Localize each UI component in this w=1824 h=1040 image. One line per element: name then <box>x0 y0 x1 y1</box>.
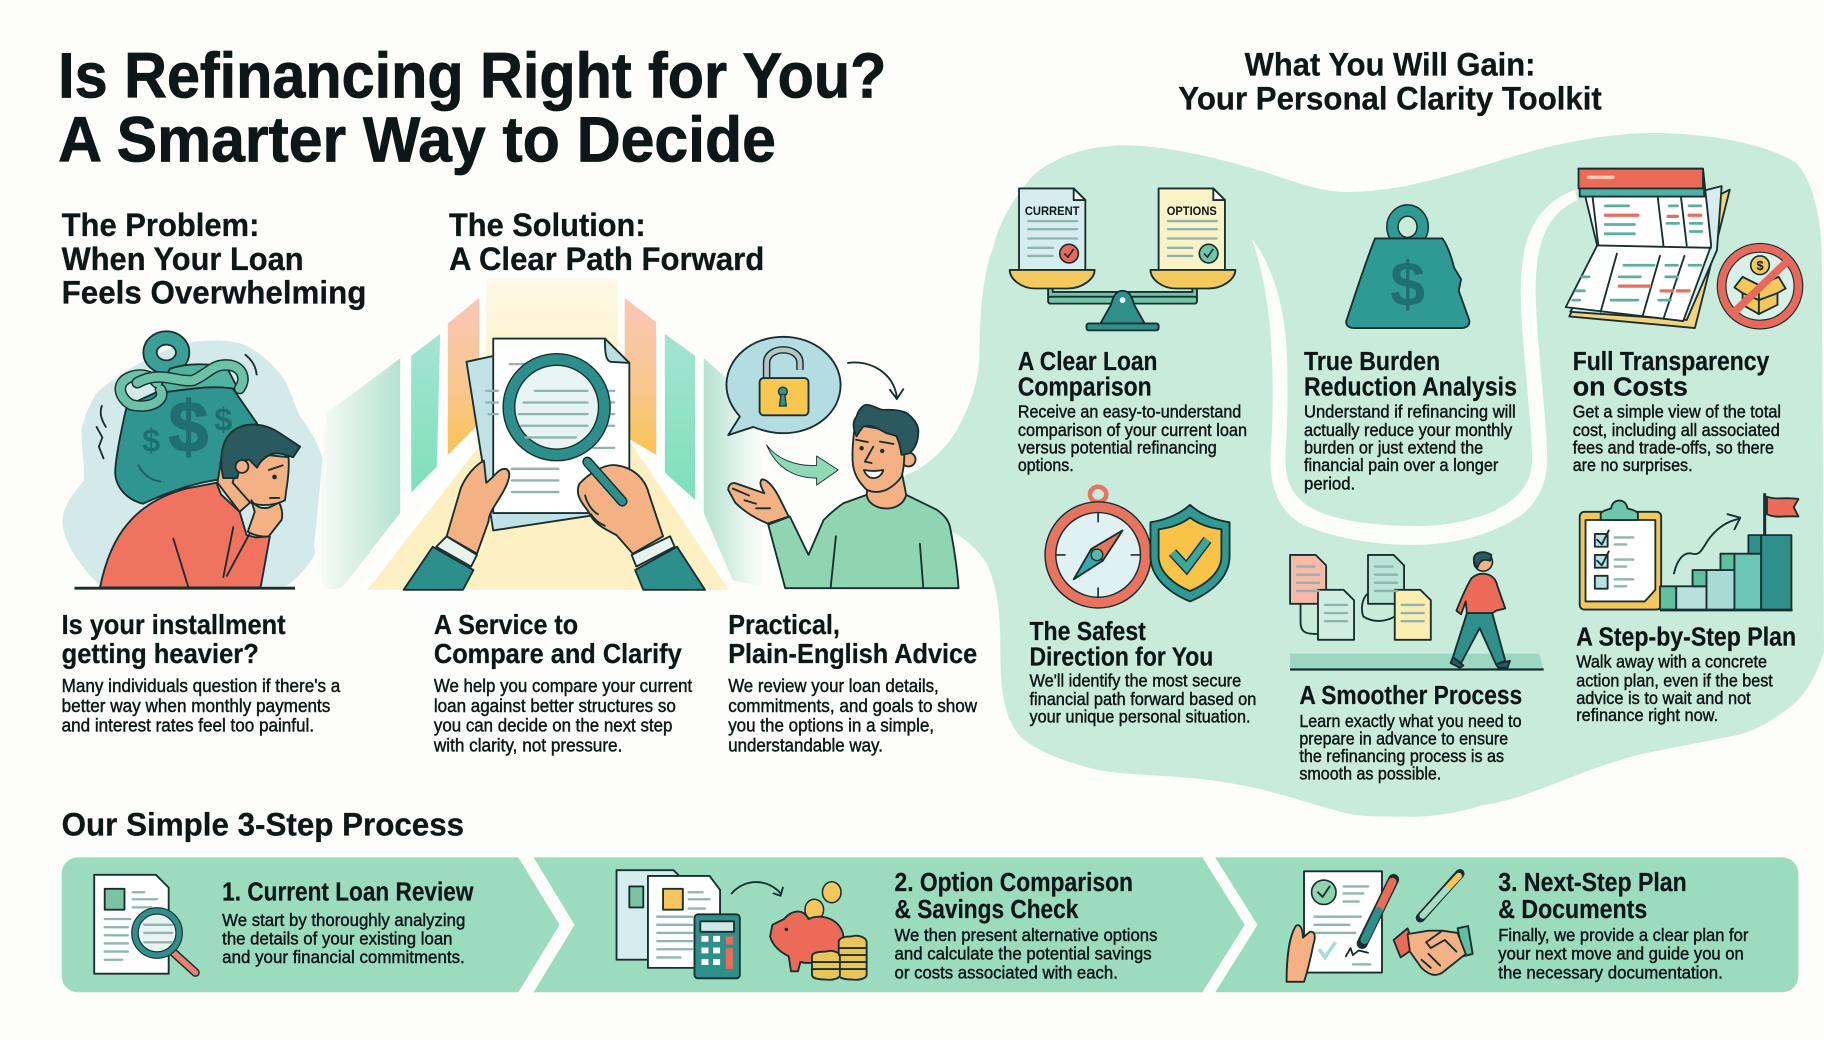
title: Is Refinancing Right for You? <box>58 40 886 112</box>
card: a step-by-step plan: A Step-by-Step Plan <box>1576 622 1796 652</box>
step 2 text: and calculate the potential savings <box>895 944 1152 964</box>
card: a step-by-step plan: Walk away with a concrete <box>1576 652 1767 672</box>
text block: a service to compare and clarify <box>433 609 692 755</box>
card: a smoother process: Learn exactly what you need to <box>1299 711 1522 731</box>
card: a smoother process: the refinancing process is as <box>1299 746 1504 766</box>
text block: a service to compare and clarify: We help you compare your current <box>434 676 692 696</box>
card: a step-by-step plan: advice is to wait and not <box>1576 688 1751 708</box>
card: the safest direction for you: The Safest <box>1029 616 1146 646</box>
step 2 text: or costs associated with each. <box>895 962 1118 982</box>
icon: money weight <box>1346 211 1469 328</box>
heading: the problem: The Problem: <box>62 207 259 243</box>
card: true burden reduction analysis: Understand if refinancing will <box>1304 402 1516 422</box>
card: a clear loan comparison: Receive an easy-to-understand <box>1018 402 1241 422</box>
step 3 text: Finally, we provide a clear plan for <box>1498 925 1749 945</box>
step 1 text: We start by thoroughly analyzing <box>222 910 465 930</box>
card: true burden reduction analysis: True Burden <box>1304 346 1440 376</box>
card: full transparency on costs: are no surprises. <box>1573 455 1693 475</box>
card: a clear loan comparison: comparison of your current loan <box>1018 420 1247 440</box>
step 3 text: your next move and guide you on <box>1498 944 1744 964</box>
card: a clear loan comparison: options. <box>1018 455 1074 475</box>
card: full transparency on costs: cost, including all associated <box>1573 420 1780 440</box>
title: A Smarter Way to Decide <box>58 104 776 176</box>
icon: balance scale comparing current and options: CURRENT <box>1025 204 1080 218</box>
text block: practical plain-english advice: We review your loan details, <box>728 676 939 696</box>
icon: money weight: $ <box>1390 250 1425 320</box>
step 3 icon: signed document, pens and handshake <box>1287 871 1473 982</box>
text block: is your installment getting heavier: better way when monthly payments <box>62 696 330 716</box>
illustration: worried man carrying a money bag <box>63 338 328 588</box>
card: a clear loan comparison <box>1018 346 1247 475</box>
step 3 text: the necessary documentation. <box>1498 962 1723 982</box>
card: full transparency on costs: fees and trade-offs, so there <box>1573 438 1774 458</box>
card: true burden reduction analysis: Reduction Analysis <box>1304 372 1517 402</box>
step 2 text: We then present alternative options <box>895 925 1158 945</box>
card: full transparency on costs <box>1573 346 1781 475</box>
text block: a service to compare and clarify: Compare and Clarify <box>434 638 682 669</box>
icon: balance scale comparing current and options <box>1010 188 1235 330</box>
step 3 text: 3. Next-Step Plan <box>1498 869 1687 897</box>
card: a step-by-step plan: action plan, even if the best <box>1576 670 1773 690</box>
card: true burden reduction analysis: burden or just extend the <box>1304 438 1483 458</box>
card: full transparency on costs: Get a simple view of the total <box>1573 402 1781 422</box>
card: true burden reduction analysis: actually reduce your monthly <box>1304 420 1512 440</box>
card: a smoother process: A Smoother Process <box>1299 680 1522 710</box>
text block: practical plain-english advice: understandable way. <box>728 735 883 755</box>
card: a step-by-step plan: refinance right now. <box>1576 705 1718 725</box>
title <box>58 40 886 176</box>
process band <box>62 856 1798 993</box>
card: a smoother process <box>1299 680 1522 783</box>
step 1 text: the details of your existing loan <box>222 929 453 949</box>
heading: what you will gain: Your Personal Clarity Toolkit <box>1178 80 1602 116</box>
card: the safest direction for you: Direction for You <box>1029 641 1213 671</box>
card: full transparency on costs: on Costs <box>1573 372 1688 402</box>
text block: is your installment getting heavier <box>62 609 341 736</box>
card: true burden reduction analysis <box>1304 346 1517 494</box>
text block: practical plain-english advice: commitments, and goals to show <box>728 696 978 716</box>
step 1 text: and your financial commitments. <box>222 947 465 967</box>
step 2 text: 2. Option Comparison <box>895 869 1133 897</box>
text block: a service to compare and clarify: A Service to <box>434 609 578 640</box>
card: the safest direction for you: your unique personal situation. <box>1029 706 1251 726</box>
icon: balance scale comparing current and options: OPTIONS <box>1167 204 1217 218</box>
illustration: worried man carrying a money bag: $ <box>214 401 232 437</box>
text block: is your installment getting heavier: getting heavier? <box>62 638 259 669</box>
text block: is your installment getting heavier: Is your installment <box>62 609 286 640</box>
step 2 text: & Savings Check <box>895 896 1079 924</box>
card: the safest direction for you: financial path forward based on <box>1029 689 1256 709</box>
text block: practical plain-english advice: Plain-English Advice <box>728 638 977 669</box>
card: a clear loan comparison: Comparison <box>1018 372 1152 402</box>
text block: a service to compare and clarify: with clarity, not pressure. <box>433 735 622 755</box>
icon: cost spreadsheet and no hidden fees sign: $ <box>1756 258 1764 273</box>
heading: the solution: A Clear Path Forward <box>449 241 764 277</box>
card: a smoother process: smooth as possible. <box>1299 763 1441 783</box>
heading: the problem: When Your Loan <box>62 241 304 277</box>
text block: a service to compare and clarify: loan against better structures so <box>434 696 676 716</box>
icon: clipboard checklist and rising steps <box>1580 493 1798 610</box>
heading: the solution <box>449 207 764 277</box>
text block: practical plain-english advice <box>728 609 978 755</box>
card: a clear loan comparison: A Clear Loan <box>1018 346 1157 376</box>
step 1 text <box>222 878 474 967</box>
icon: cost spreadsheet and no hidden fees sign <box>1566 169 1798 328</box>
card: a smoother process: prepare in advance to ensure <box>1299 729 1508 749</box>
card: full transparency on costs: Full Transparency <box>1573 346 1770 376</box>
step 2 text <box>895 869 1158 982</box>
text block: is your installment getting heavier: and interest rates feel too painful. <box>62 716 314 736</box>
text block: is your installment getting heavier: Many individuals question if there's a <box>62 676 341 696</box>
card: a step-by-step plan <box>1576 622 1796 725</box>
illustration: worried man carrying a money bag: $ <box>168 387 209 467</box>
step 3 text <box>1498 869 1749 982</box>
step 1 text: 1. Current Loan Review <box>222 878 474 906</box>
card: a clear loan comparison: versus potential refinancing <box>1018 438 1217 458</box>
heading: the problem <box>62 207 366 311</box>
card: true burden reduction analysis: financial pain over a longer <box>1304 455 1498 475</box>
card: true burden reduction analysis: period. <box>1304 474 1355 494</box>
icon: compass and shield <box>1050 487 1230 603</box>
panel: toolkit blob background <box>884 133 1824 817</box>
text block: practical plain-english advice: you the options in a simple, <box>728 716 934 736</box>
step 2 icon: documents, calculator and piggy bank <box>617 870 867 980</box>
heading: the solution: The Solution: <box>449 207 646 243</box>
heading: the problem: Feels Overwhelming <box>62 275 366 311</box>
card: the safest direction for you <box>1029 616 1256 726</box>
text block: a service to compare and clarify: you can decide on the next step <box>434 716 672 736</box>
heading: our simple 3-step process: Our Simple 3-Step Process <box>62 806 464 842</box>
step 1 icon: document with magnifier <box>94 875 195 974</box>
illustration: hallway with document and magnifier <box>314 279 762 590</box>
illustration: advisor with unlocked padlock speech bubble <box>726 337 959 588</box>
card: the safest direction for you: We'll identify the most secure <box>1029 670 1241 690</box>
illustration: worried man carrying a money bag: $ <box>142 422 160 458</box>
step 3 text: & Documents <box>1498 896 1647 924</box>
icon: documents and walking person <box>1290 552 1544 669</box>
text block: practical plain-english advice: Practical, <box>728 609 840 640</box>
heading: what you will gain: What You Will Gain: <box>1245 47 1536 83</box>
heading: what you will gain <box>1178 47 1602 116</box>
